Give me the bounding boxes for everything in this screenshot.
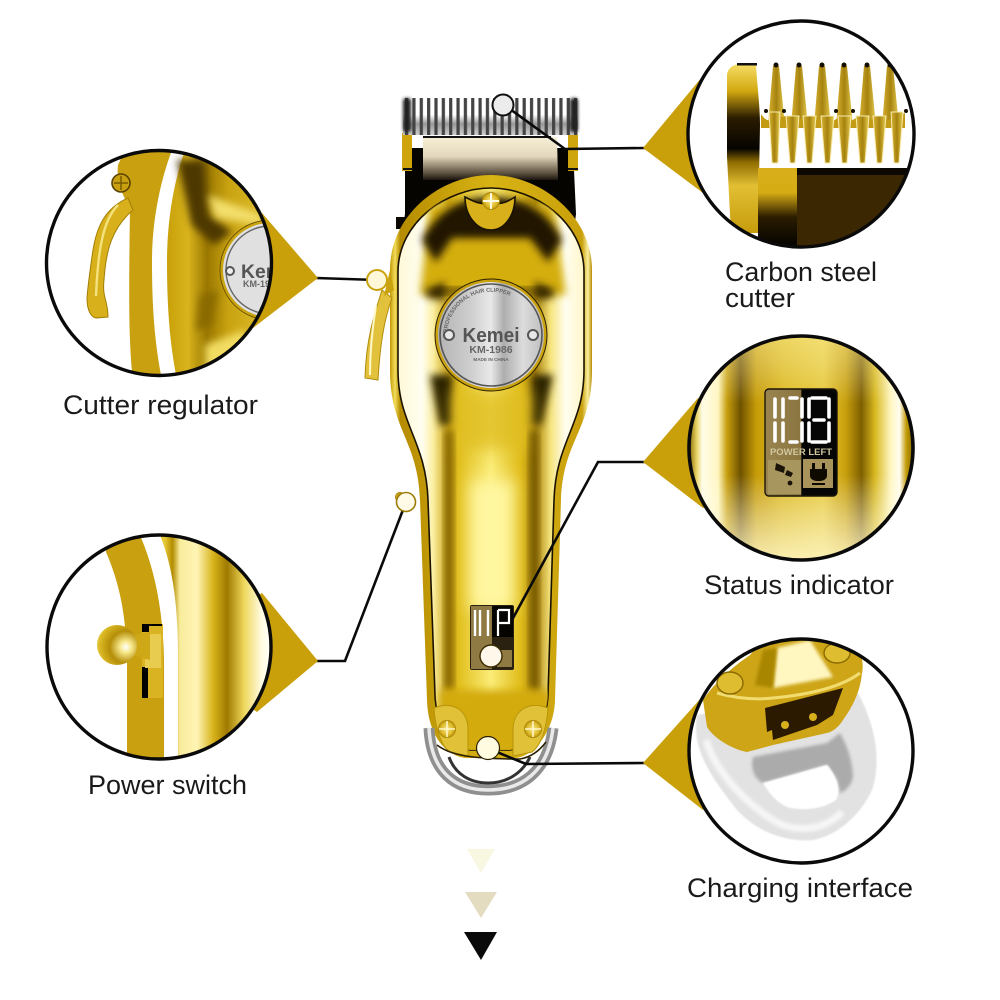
power switch knob xyxy=(396,492,404,502)
bottom cap xyxy=(434,705,548,759)
lever arm xyxy=(87,198,133,318)
pointer triangle xyxy=(159,213,318,328)
gum bar xyxy=(761,113,905,128)
medallion xyxy=(434,278,548,392)
label: cutter regulator: Cutter regulator xyxy=(63,390,258,420)
enlarged LCD xyxy=(765,389,837,496)
arrow: beige down xyxy=(465,892,497,918)
hotspot: lever xyxy=(367,270,387,290)
handle display xyxy=(470,605,514,670)
pointer triangle xyxy=(643,77,801,193)
top screw bump xyxy=(465,192,515,230)
panel: status indicator: POWER LEFT xyxy=(770,447,833,457)
lower teeth xyxy=(769,112,903,163)
pointer triangle xyxy=(643,398,801,508)
label: status indicator: Status indicator xyxy=(704,570,894,600)
adjuster lever xyxy=(365,270,394,380)
gold cap xyxy=(703,640,863,752)
medallion: KM-1986 xyxy=(469,344,513,356)
pointer triangle xyxy=(643,697,801,810)
left strip xyxy=(727,64,760,233)
panel: cutter regulator: Kemei xyxy=(241,262,299,283)
footprints icon xyxy=(775,463,793,477)
leader line: power switch xyxy=(316,502,406,661)
blade housing xyxy=(396,133,578,245)
label: carbon steel cutter xyxy=(725,257,877,313)
hotspot: blade xyxy=(492,94,514,116)
switch knob xyxy=(134,632,150,660)
panel: cutter regulator xyxy=(46,150,320,380)
hotspot: switch xyxy=(396,492,416,512)
upper teeth xyxy=(768,66,899,126)
clipper body xyxy=(390,175,592,758)
label: carbon steel cutter: Carbon steel xyxy=(725,257,877,287)
label: charging interface: Charging interface xyxy=(687,873,913,903)
lower block xyxy=(758,168,797,250)
dark plate xyxy=(797,175,904,246)
plug icon xyxy=(810,463,827,485)
panel: charging interface xyxy=(643,639,913,863)
pointer triangle xyxy=(159,593,318,712)
hotspot: charging xyxy=(476,736,500,760)
medallion: Kemei xyxy=(462,325,520,347)
medallion: PROFESSIONAL HAIR CLIPPER xyxy=(443,288,511,332)
leader line: status indicator xyxy=(512,462,645,620)
arrow: pale down xyxy=(467,849,495,873)
switch slot xyxy=(142,624,163,698)
panel: power switch xyxy=(47,535,318,760)
label: power switch: Power switch xyxy=(88,770,247,800)
hotspot: display xyxy=(480,645,502,667)
charging port xyxy=(765,688,843,740)
charging loop xyxy=(429,728,553,790)
arrow: black down xyxy=(464,932,497,960)
silver loop xyxy=(696,693,877,840)
magnified medallion xyxy=(220,220,262,318)
medallion: MADE IN CHINA xyxy=(473,357,509,362)
panel: status indicator xyxy=(643,336,913,560)
lever screw xyxy=(112,174,130,192)
leader line: carbon steel cutter xyxy=(503,104,645,149)
panel: carbon steel cutter xyxy=(643,21,914,250)
leader line: charging interface xyxy=(487,748,645,764)
label: carbon steel cutter: cutter xyxy=(725,283,795,313)
panel: cutter regulator: KM-1986 xyxy=(243,279,280,289)
leader line: cutter regulator xyxy=(316,278,377,280)
blade plate xyxy=(423,137,558,180)
clipper xyxy=(364,96,592,796)
cutting teeth xyxy=(403,98,578,135)
